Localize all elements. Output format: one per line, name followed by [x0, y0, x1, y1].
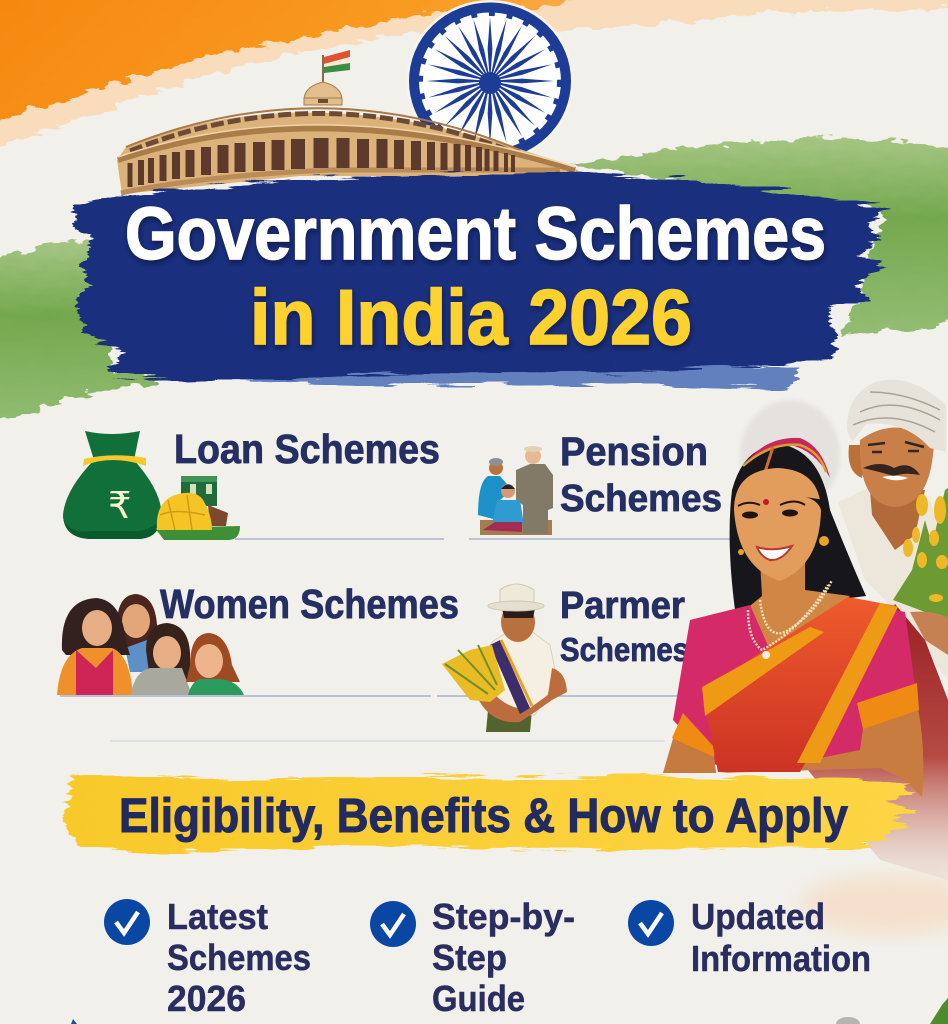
man's neck and face: [870, 490, 925, 550]
building body: [117, 113, 578, 194]
title brush banner: [74, 172, 888, 390]
icon: cash and gold: [155, 476, 240, 540]
yellow banner: [62, 775, 915, 852]
divider lines: [60, 539, 735, 741]
item text: Updated: [691, 896, 825, 937]
item text: Step-by-: [432, 896, 575, 937]
checklist: updated information: [628, 896, 871, 979]
face: [734, 468, 821, 581]
right drape: [800, 604, 948, 880]
item text: 2026: [167, 978, 246, 1019]
item text: Information: [691, 938, 871, 979]
portrait: man with turban: [838, 380, 948, 680]
halo: [740, 400, 840, 510]
man's eyes: [868, 442, 924, 452]
bottom edge details: [71, 998, 948, 1024]
blouse: [673, 600, 917, 765]
eyes, brows, bindi and smile: [738, 499, 805, 560]
woman back: [117, 594, 157, 650]
icon: check: [370, 901, 416, 947]
saffron band: [0, 0, 948, 152]
parliament building: [117, 50, 578, 194]
icon: check: [104, 899, 150, 945]
item text: Guide: [432, 978, 525, 1019]
sleeve bands: [672, 713, 715, 757]
navy brush stroke: [74, 172, 888, 383]
banner heading: Eligibility, Benefits & How to Apply: [119, 790, 848, 843]
item text: Step: [432, 937, 507, 978]
woman left: [62, 598, 130, 655]
item text: Latest: [167, 896, 268, 937]
title line two: in India 2026: [250, 273, 692, 361]
neck: [745, 560, 850, 650]
turban: [847, 380, 946, 452]
icon: farmer: [442, 584, 567, 732]
label: Loan Schemes: [174, 426, 440, 472]
dome: [304, 82, 342, 105]
brush stroke: [62, 775, 915, 852]
hair: [730, 445, 866, 612]
title line one: Government Schemes: [125, 192, 826, 275]
scheme: farmer: [442, 584, 689, 732]
scheme: women: [57, 581, 459, 695]
checklist: latest schemes: [104, 896, 311, 1019]
bouquet: [893, 488, 948, 618]
right arm: [720, 708, 923, 797]
green band right: [570, 137, 948, 336]
flag on dome: [322, 50, 350, 85]
label: Pension: [560, 430, 708, 474]
icon: check: [628, 900, 674, 946]
green band left: [0, 240, 180, 428]
label: Women Schemes: [160, 581, 459, 627]
wheel spokes: [426, 17, 554, 145]
saree pleats: [702, 597, 897, 772]
icon: group of women: [57, 594, 244, 695]
left forearm: [663, 735, 716, 773]
woman right: [186, 633, 240, 682]
scheme: loan: [63, 426, 440, 540]
colonnade windows: [128, 138, 515, 187]
saree gold borders: [702, 627, 824, 716]
checklist: step-by-step guide: [370, 896, 575, 1019]
portrait: woman in saree: [663, 400, 948, 880]
scheme: pension: Schemes: [560, 478, 722, 520]
item text: Schemes: [167, 937, 311, 978]
man's hand: [910, 612, 948, 655]
light brush streak: [190, 362, 800, 390]
icon: pension family: [478, 446, 553, 535]
woman mid: [146, 623, 190, 680]
label: Parmer: [560, 585, 685, 627]
ashoka chakra wheel: [406, 0, 574, 162]
necklace: [748, 580, 832, 650]
warm wash bottom right: [800, 875, 948, 935]
headband: [743, 438, 830, 478]
man's coat: [838, 488, 948, 680]
moustache: [863, 464, 920, 476]
scheme: pension: [478, 430, 722, 535]
icon: money bag: [63, 431, 161, 539]
icon: money bag: ₹: [108, 484, 132, 527]
scheme: farmer: Schemes: [560, 631, 689, 668]
